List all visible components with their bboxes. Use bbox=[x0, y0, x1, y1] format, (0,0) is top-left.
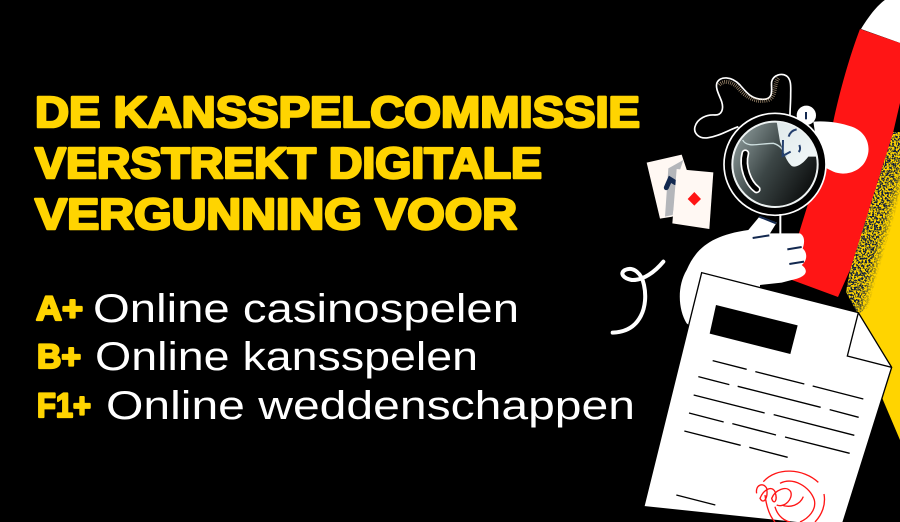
magnifier bbox=[724, 113, 826, 235]
heading bbox=[35, 88, 640, 239]
arm and hand bbox=[680, 216, 806, 333]
logo block bbox=[710, 305, 798, 354]
paper sheet bbox=[644, 273, 892, 522]
heading: VERGUNNING VOOR bbox=[35, 190, 517, 239]
licence B+: B+ bbox=[37, 338, 81, 376]
illustration: person with magnifier and cards bbox=[647, 74, 869, 333]
licence A+: Online casinospelen bbox=[93, 287, 519, 331]
ear bbox=[797, 106, 816, 125]
licence list bbox=[36, 287, 635, 428]
heading: VERSTREKT DIGITALE bbox=[35, 139, 542, 188]
hair speckles bbox=[719, 78, 778, 101]
yellow band with speckled edge bbox=[846, 132, 900, 440]
red stamp signature bbox=[756, 471, 824, 522]
licence B+: Online kansspelen bbox=[95, 335, 478, 379]
head bbox=[813, 121, 869, 174]
text lines bbox=[676, 361, 863, 505]
heading: DE KANSSPELCOMMISSIE bbox=[35, 88, 640, 137]
icon: white squiggle bbox=[613, 262, 663, 333]
hair outline bbox=[695, 74, 791, 138]
licence F1+: F1+ bbox=[37, 387, 91, 425]
paper edge and fold bbox=[644, 273, 892, 522]
licence F1+: Online weddenschappen bbox=[106, 384, 635, 428]
icon: playing cards bbox=[647, 155, 713, 229]
licence A+: A+ bbox=[36, 290, 83, 328]
red band with white tip bbox=[792, 0, 900, 297]
document bbox=[644, 273, 892, 522]
